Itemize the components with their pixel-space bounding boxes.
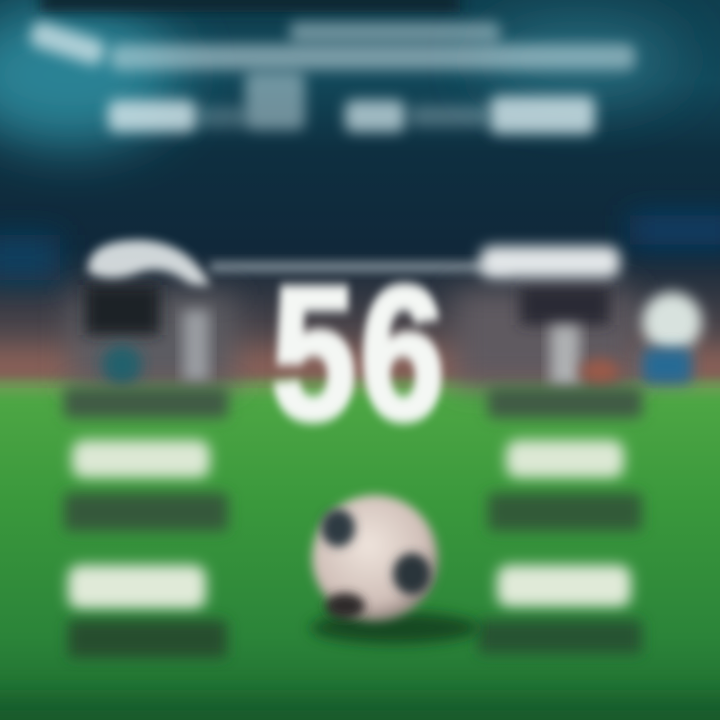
central number: 56 xyxy=(272,248,449,458)
left stat 1 xyxy=(64,388,228,478)
left stat 3 xyxy=(68,620,227,658)
right heading xyxy=(480,246,620,278)
left stat 2 xyxy=(64,493,228,609)
right stat 3 xyxy=(478,620,642,654)
panel: right player card xyxy=(455,246,635,387)
panel: left player card xyxy=(70,240,235,385)
icon: right-side figure xyxy=(642,292,702,384)
pitch xyxy=(0,380,720,720)
right stat 1 xyxy=(488,388,642,478)
right stat 2 xyxy=(488,493,642,607)
icon: soccer ball xyxy=(310,495,480,644)
stadium background xyxy=(0,0,720,400)
title xyxy=(28,19,635,134)
left heading xyxy=(88,240,210,286)
